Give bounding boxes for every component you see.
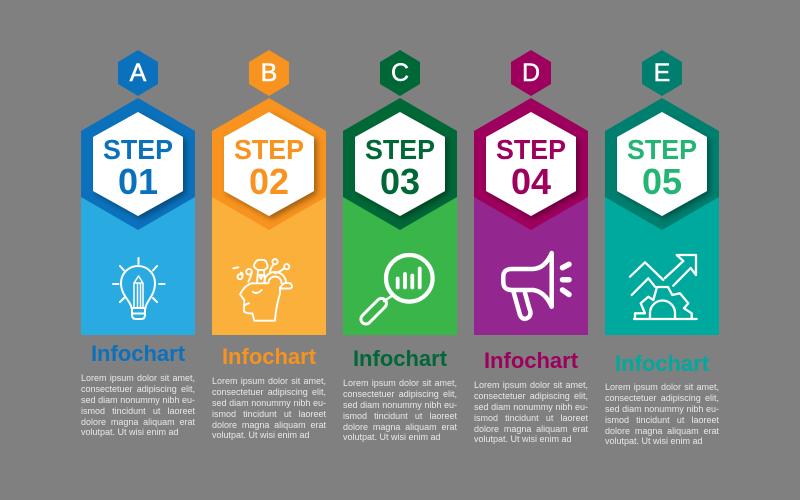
text block D: consectetuer adipiscing elit, <box>474 391 588 401</box>
step number 04: 04 <box>511 161 551 202</box>
badge B: B <box>261 59 277 87</box>
text block C: Lorem ipsum dolor sit amet, <box>343 378 457 388</box>
text block C: consectetuer adipiscing elit, <box>343 389 457 399</box>
step label A: STEP <box>103 134 173 165</box>
icon: head with ideas <box>233 259 292 321</box>
text block A <box>81 373 195 437</box>
white hexagon E <box>617 112 707 216</box>
badge D: D <box>522 59 540 87</box>
badge E <box>642 50 682 96</box>
text block B: Lorem ipsum dolor sit amet, <box>212 376 326 386</box>
badge C <box>380 50 420 96</box>
text block D: Lorem ipsum dolor sit amet, <box>474 380 588 390</box>
badge A <box>118 50 158 96</box>
step label D: STEP <box>496 134 566 165</box>
text block E: ismod tincidunt ut laoreet <box>605 415 719 425</box>
outer hexagon D <box>474 98 588 230</box>
badge B <box>249 50 289 96</box>
text block C: volutpat. Ut wisi enim ad <box>343 432 441 442</box>
icon: megaphone <box>503 253 569 319</box>
step number 05: 05 <box>642 161 682 202</box>
panel B <box>212 190 326 335</box>
text block A: volutpat. Ut wisi enim ad <box>81 427 179 437</box>
text block A: consectetuer adipiscing elit, <box>81 384 195 394</box>
step E column <box>605 50 719 335</box>
text block E: dolore magna aliquam erat <box>605 426 719 436</box>
panel C <box>343 190 457 335</box>
text block D: volutpat. Ut wisi enim ad <box>474 434 572 444</box>
title B: Infochart <box>222 344 317 369</box>
outer hexagon A <box>81 98 195 230</box>
text block B: ismod tincidunt ut laoreet <box>212 409 326 419</box>
badge D <box>511 50 551 96</box>
step number 03: 03 <box>380 161 420 202</box>
text block C <box>343 378 457 442</box>
text block E <box>605 382 719 446</box>
text block A: Lorem ipsum dolor sit amet, <box>81 373 195 383</box>
white hexagon C <box>355 112 445 216</box>
title C: Infochart <box>353 346 448 371</box>
icon: growth arrow and gear <box>630 255 697 319</box>
text block E: sed diam nonummy nibh eu- <box>605 404 719 414</box>
panel D <box>474 190 588 335</box>
badge C: C <box>391 59 409 87</box>
text block A: sed diam nonummy nibh eu- <box>81 395 195 405</box>
step D column <box>474 50 588 335</box>
text block D: ismod tincidunt ut laoreet <box>474 413 588 423</box>
step label E: STEP <box>627 134 697 165</box>
white hexagon B <box>224 112 314 216</box>
step label C: STEP <box>365 134 435 165</box>
step label B: STEP <box>234 134 304 165</box>
title A: Infochart <box>91 341 186 366</box>
white hexagon D <box>486 112 576 216</box>
text block B: consectetuer adipiscing elit, <box>212 387 326 397</box>
step number 01: 01 <box>118 161 158 202</box>
text block C: dolore magna aliquam erat <box>343 422 457 432</box>
text block B <box>212 376 326 440</box>
icon: light bulb pencil <box>113 258 164 319</box>
text block B: sed diam nonummy nibh eu- <box>212 398 326 408</box>
text block B: dolore magna aliquam erat <box>212 420 326 430</box>
panel A <box>81 190 195 335</box>
text block D: dolore magna aliquam erat <box>474 424 588 434</box>
text block D <box>474 380 588 444</box>
step C column <box>343 50 457 335</box>
icon: magnifier chart <box>359 255 433 326</box>
step number 02: 02 <box>249 161 289 202</box>
outer hexagon E <box>605 98 719 230</box>
text block D: sed diam nonummy nibh eu- <box>474 402 588 412</box>
title D: Infochart <box>484 348 579 373</box>
step A column <box>81 50 195 335</box>
text block C: ismod tincidunt ut laoreet <box>343 411 457 421</box>
panel E <box>605 190 719 335</box>
text block E: consectetuer adipiscing elit, <box>605 393 719 403</box>
outer hexagon C <box>343 98 457 230</box>
white hexagon A <box>93 112 183 216</box>
text block A: ismod tincidunt ut laoreet <box>81 406 195 416</box>
outer hexagon B <box>212 98 326 230</box>
badge A: A <box>130 59 147 87</box>
text block E: Lorem ipsum dolor sit amet, <box>605 382 719 392</box>
text block E: volutpat. Ut wisi enim ad <box>605 436 703 446</box>
badge E: E <box>654 59 670 87</box>
text block B: volutpat. Ut wisi enim ad <box>212 430 310 440</box>
text block C: sed diam nonummy nibh eu- <box>343 400 457 410</box>
text block A: dolore magna aliquam erat <box>81 417 195 427</box>
title E: Infochart <box>615 351 710 376</box>
step B column <box>212 50 326 335</box>
